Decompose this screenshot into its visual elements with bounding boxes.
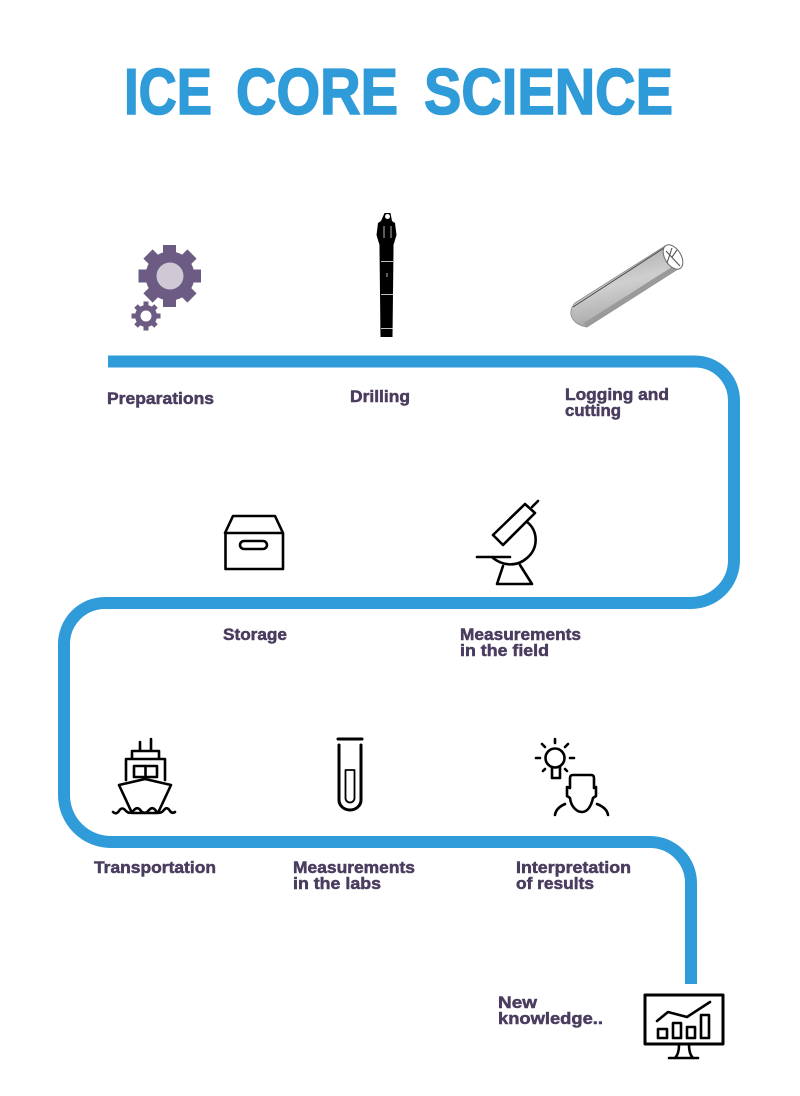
label: Measurements in the labs: Measurements — [293, 859, 415, 877]
title: ICE — [124, 55, 212, 128]
icon: ship — [113, 739, 175, 813]
icon: person with light bulb — [536, 739, 608, 815]
label: Transportation: Transportation — [94, 859, 216, 877]
label: Measurements in the field: Measurements — [460, 626, 581, 644]
label: New knowledge: knowledge.. — [498, 1010, 603, 1028]
label: Drilling: Drilling — [350, 388, 410, 406]
icon: gears — [132, 245, 201, 330]
label: Interpretation of results: of results — [516, 875, 594, 893]
label: Measurements in the labs: in the labs — [293, 875, 381, 893]
icon: storage box — [225, 516, 283, 569]
label: Logging and cutting: Logging and — [565, 386, 669, 404]
icon: ice core drill — [376, 213, 396, 337]
title: CORE — [236, 55, 398, 128]
icon: test tube — [338, 739, 362, 810]
label: Storage: Storage — [223, 626, 287, 644]
label: New knowledge: New — [498, 994, 537, 1012]
title: SCIENCE — [424, 55, 673, 128]
icon: ice core cylinder — [571, 241, 687, 327]
winding timeline path — [64, 362, 734, 984]
label: Measurements in the field: in the field — [460, 642, 549, 660]
icon: monitor with chart — [645, 995, 723, 1058]
icon: microscope — [477, 501, 538, 584]
label: Preparations: Preparations — [107, 390, 214, 408]
label: Interpretation of results: Interpretation — [516, 859, 631, 877]
label: Logging and cutting: cutting — [565, 402, 621, 420]
title — [124, 55, 673, 128]
